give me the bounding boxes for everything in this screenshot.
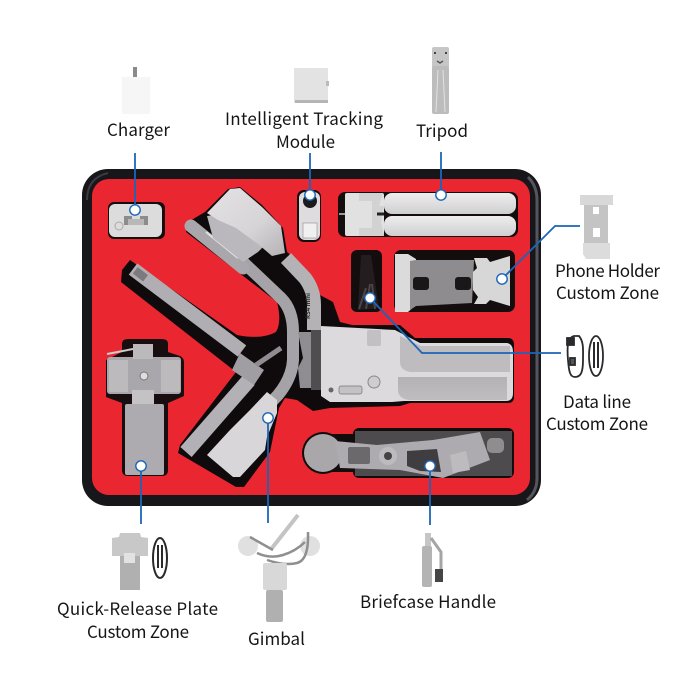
- module slot: [297, 190, 321, 242]
- heading: briefcase handle: Briefcase Handle: [360, 588, 496, 613]
- heading: data line: [546, 388, 648, 435]
- RS4 mini mark: RS4 mini: [303, 293, 312, 319]
- heading: quick-release plate: Quick-Release Plate: [57, 595, 218, 620]
- roll motor: [298, 332, 314, 388]
- head motor: [207, 188, 285, 256]
- cable slot: [351, 250, 382, 312]
- heading: phone holder: Custom Zone: [556, 279, 659, 304]
- callout: data line: [365, 293, 561, 353]
- heading: charger: Charger: [107, 116, 170, 141]
- handle lower panel: [398, 377, 507, 400]
- heading: tracking module: Intelligent Tracking: [225, 105, 383, 130]
- icon: quick-release plate: [112, 533, 167, 590]
- body and handle: [321, 326, 513, 402]
- callout: quick-release plate: [136, 461, 146, 524]
- tilt tube: [243, 262, 293, 412]
- heading: phone holder: Phone Holder: [555, 257, 660, 282]
- upper arm bar: [191, 226, 243, 268]
- heading: quick-release plate: Custom Zone: [87, 618, 189, 643]
- handle upper panel: [400, 336, 510, 372]
- phone holder slot: [394, 250, 515, 312]
- heading: tracking module: Module: [276, 128, 335, 153]
- heading: data line: Custom Zone: [546, 410, 648, 435]
- callout: gimbal: [263, 413, 273, 523]
- charger slot: [108, 202, 165, 239]
- icon: briefcase handle: [422, 533, 443, 587]
- callout: phone holder: [497, 226, 580, 284]
- pan tube: [286, 258, 314, 330]
- heading: phone holder: [555, 257, 660, 304]
- icon: tripod: [432, 47, 449, 114]
- heading: quick-release plate: [57, 595, 218, 643]
- icon: phone holder: [580, 195, 613, 259]
- red foam: [92, 179, 530, 495]
- tripod slot: [338, 192, 518, 237]
- heading: data line: Data line: [563, 388, 631, 413]
- dial and switch: [368, 376, 380, 388]
- icon: charger: [122, 67, 150, 114]
- lower arm bar: [133, 269, 242, 351]
- icon: gimbal: [238, 515, 320, 622]
- heading: tracking module: [225, 105, 383, 153]
- callout: tripod: [436, 152, 446, 200]
- quick-release plate slot: [106, 339, 184, 476]
- folded arm bar: [186, 380, 249, 452]
- callout: tracking module: [305, 153, 315, 200]
- icon: data line: [567, 336, 603, 377]
- gimbal cutout: [121, 187, 514, 487]
- lower motor: [207, 392, 277, 477]
- callout: briefcase handle: [425, 461, 435, 525]
- heading: gimbal: Gimbal: [248, 625, 305, 650]
- head ring: [207, 214, 266, 262]
- panel: case: [82, 169, 541, 506]
- callout: charger: [130, 153, 140, 215]
- heading: tripod: Tripod: [416, 117, 468, 142]
- icon: tracking module: [294, 68, 329, 103]
- gimbal: [133, 188, 513, 477]
- briefcase handle slot: [302, 428, 514, 478]
